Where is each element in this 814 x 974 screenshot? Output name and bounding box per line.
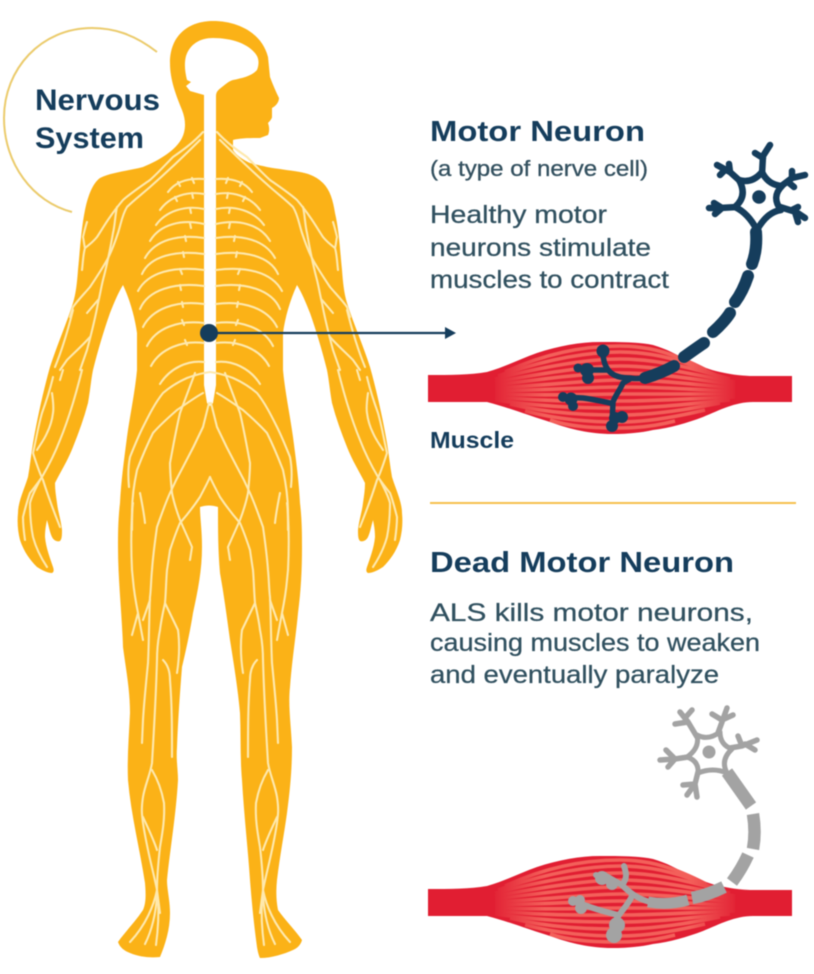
nerves, right half (mirror) xyxy=(210,132,397,945)
cell body xyxy=(687,732,732,773)
motor neuron, dead xyxy=(568,708,757,943)
healthy motor neuron description: neurons stimulate xyxy=(430,234,651,262)
nucleus xyxy=(752,190,766,204)
brain and spinal cord xyxy=(185,38,258,406)
axon terminals xyxy=(572,866,650,938)
leg nerves xyxy=(130,603,172,945)
heading: Motor Neuron: Motor Neuron xyxy=(430,116,645,148)
heading: Nervous System: Nervous xyxy=(35,84,160,117)
muscle fibres xyxy=(495,346,735,428)
circle arc around nervous system label xyxy=(4,28,157,212)
pelvis nerves xyxy=(128,372,210,743)
arm nerves xyxy=(23,132,203,567)
dendrites xyxy=(709,145,805,222)
heading: Nervous System: System xyxy=(35,122,144,155)
body silhouette xyxy=(18,21,402,958)
healthy motor neuron description: muscles to contract xyxy=(430,266,669,294)
dead motor neuron description: and eventually paralyze xyxy=(430,661,719,689)
dead motor neuron description: causing muscles to weaken xyxy=(430,629,760,657)
terminal bulbs xyxy=(568,871,625,943)
muscle, healthy xyxy=(428,342,792,434)
terminal bulbs xyxy=(558,344,628,432)
muscle label: Muscle xyxy=(430,427,514,453)
muscle, weakened xyxy=(428,856,792,948)
motor neuron, healthy xyxy=(558,145,805,432)
pointer arrow from spine to motor neuron xyxy=(200,324,456,342)
dendrites xyxy=(660,708,757,797)
nerves, left half xyxy=(23,132,210,945)
subheading: (a type of nerve cell) xyxy=(430,156,648,181)
axon segments xyxy=(648,772,754,903)
healthy motor neuron description: Healthy motor xyxy=(430,201,607,229)
heading: Nervous System xyxy=(35,84,160,155)
dead motor neuron description: ALS kills motor neurons, xyxy=(430,599,753,627)
healthy motor neuron description xyxy=(430,201,669,294)
cell body xyxy=(735,172,782,230)
heading: Dead Motor Neuron: Dead Motor Neuron xyxy=(430,547,734,579)
nucleus xyxy=(702,746,716,758)
axon terminals xyxy=(563,352,650,425)
rib nerves xyxy=(138,178,204,384)
dead motor neuron description xyxy=(430,599,760,689)
axon segments xyxy=(645,232,756,378)
human body with nerves xyxy=(18,21,402,958)
